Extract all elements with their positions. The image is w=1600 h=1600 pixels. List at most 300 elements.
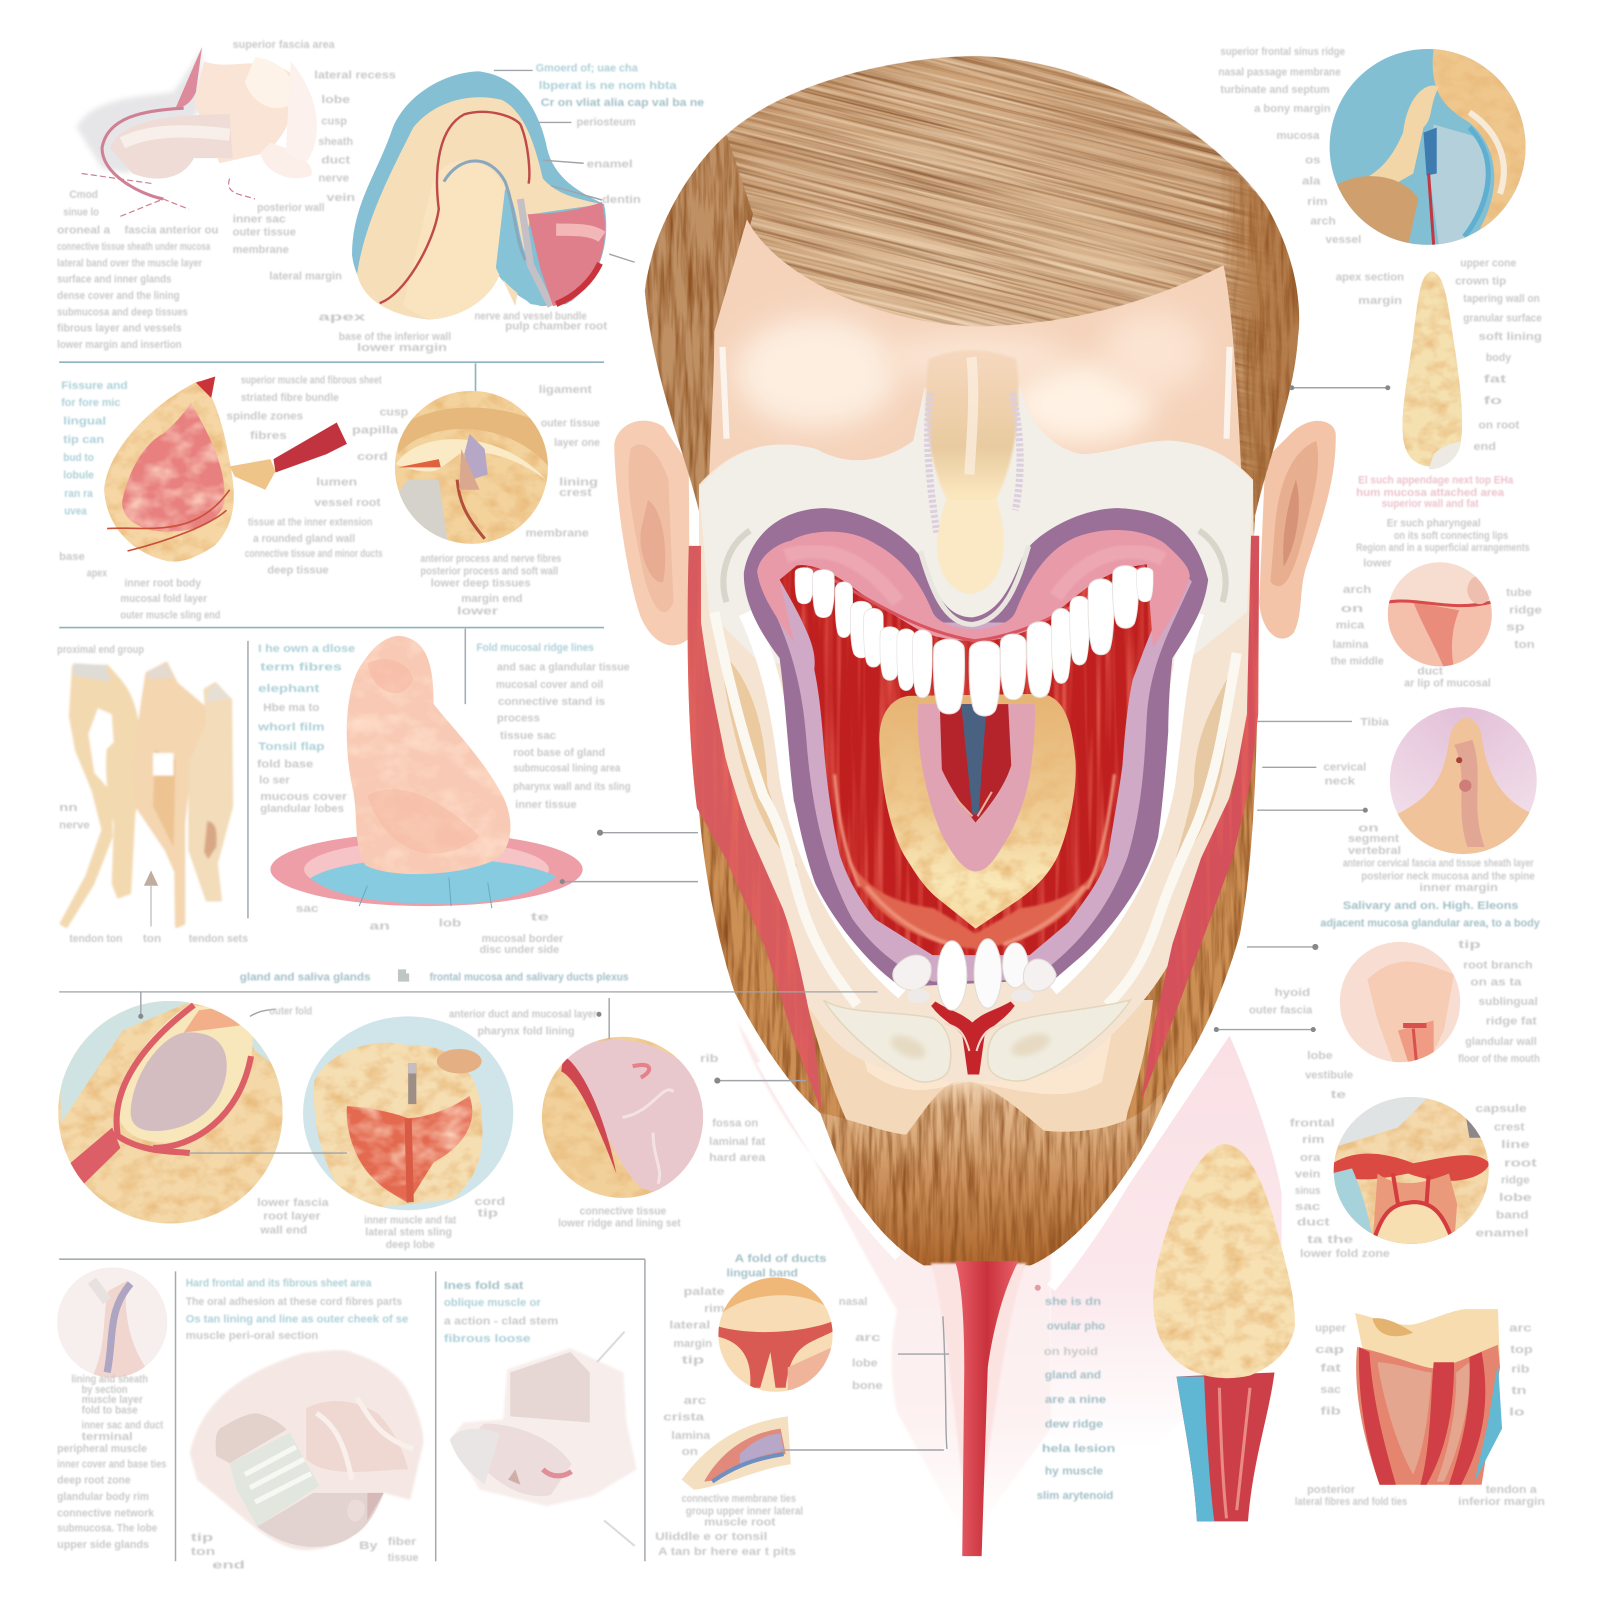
labels: R8: inferior margin xyxy=(1458,1496,1545,1508)
labels: R4: neck xyxy=(1324,776,1355,788)
labels: gland: striated fibre bundle xyxy=(241,392,339,404)
bone and fascia mask xyxy=(699,388,1255,1082)
labels: tissue bundle panel: oblique muscle or xyxy=(444,1297,541,1309)
labels: R1: superior frontal sinus ridge xyxy=(1220,46,1345,58)
labels: small details: Uliddle e or tonsil xyxy=(655,1531,767,1543)
labels: neck column: ovular pho xyxy=(1047,1321,1106,1333)
labels: gland: fibres xyxy=(250,430,287,442)
labels: R6: frontal xyxy=(1290,1118,1335,1130)
head illustration xyxy=(529,0,1415,1265)
leader line: R2 xyxy=(1289,385,1390,390)
white ribbons xyxy=(747,612,1196,992)
labels: pale circle xyxy=(57,1374,166,1551)
labels: R1: a bony margin xyxy=(1254,103,1331,115)
beard and jaw silhouette xyxy=(694,714,1257,1265)
labels: circular tissue detail: outer tissue xyxy=(541,418,600,430)
labels: middle bottom panel: Os tan lining and line as outer cheek of se xyxy=(186,1313,408,1325)
panel: right circle R1 xyxy=(1327,46,1531,250)
labels: gland: lingual xyxy=(63,415,106,427)
labels: R6: capsule xyxy=(1476,1103,1527,1115)
labels: top-left text column: lateral band over the muscle layer xyxy=(57,257,202,269)
labels: R6: rim xyxy=(1302,1134,1324,1146)
labels: pink mass: Hbe ma to xyxy=(263,702,320,714)
labels: R1: nasal passage membrane xyxy=(1218,67,1341,79)
upper gum xyxy=(757,530,1190,648)
panel: gland with blue and red stem xyxy=(1153,1144,1295,1521)
labels: R5: sublingual xyxy=(1479,996,1538,1008)
beard on chin xyxy=(820,1079,1176,1265)
mouth purple ring xyxy=(744,508,1208,987)
labels: R3: ton xyxy=(1514,639,1535,651)
labels: pink mass: process xyxy=(497,712,540,724)
labels: small details: lingual band xyxy=(727,1268,798,1280)
labels: circles row: inner muscle and fat xyxy=(364,1214,456,1226)
labels: middle bottom panel: By xyxy=(359,1540,378,1552)
labels: pink mass: inner tissue xyxy=(515,799,577,811)
panel: pale circle xyxy=(57,1267,167,1378)
labels: circles row: lower fascia xyxy=(257,1197,330,1209)
labels: R8: sac xyxy=(1320,1384,1341,1396)
labels: pale circle: terminal xyxy=(82,1431,133,1443)
labels: R8: tendon a xyxy=(1486,1484,1538,1496)
labels: top-left text column: dense cover and the lining xyxy=(57,290,180,302)
leader lines: tooth section xyxy=(494,70,635,262)
panel: pale tissue bundle xyxy=(450,1332,637,1546)
labels: neck column: are a nine xyxy=(1045,1394,1106,1406)
labels: pale circle: inner sac and duct xyxy=(82,1420,164,1432)
labels: R4: vertebral xyxy=(1348,845,1401,857)
panel: leaf shaped detail xyxy=(682,1416,791,1490)
labels: top-left text column: nerve xyxy=(318,173,349,185)
text block: blue note: adjacent mucosa glandular area, to a body xyxy=(1320,918,1540,930)
labels: pale circle: by section xyxy=(82,1384,128,1396)
labels: R3: duct xyxy=(1417,665,1443,677)
central throat slit xyxy=(940,704,1011,822)
labels: circular tissue detail: lining xyxy=(559,477,598,489)
labels: circular tissue detail: margin end xyxy=(461,593,522,605)
labels: tooth section: lbperat is ne nom hbta xyxy=(539,80,678,92)
labels: top-left text column: duct xyxy=(321,154,351,166)
labels: circular tissue detail: ligament xyxy=(539,384,592,396)
labels: circles row: lateral stem sling xyxy=(365,1227,452,1239)
panel: pink mass on disc xyxy=(270,636,583,908)
leader lines: right mid xyxy=(1214,721,1368,1032)
labels: tissue bundle panel: fibrous loose xyxy=(444,1333,531,1345)
labels: circles row: laminal fat xyxy=(709,1136,766,1148)
labels: circles row: root layer xyxy=(263,1210,320,1222)
labels: top-left text column: oroneal a xyxy=(57,225,111,237)
labels: R5: tip xyxy=(1458,939,1481,951)
labels: R1 xyxy=(1218,46,1361,246)
labels: gland: base xyxy=(59,551,85,563)
beige patches xyxy=(722,653,798,867)
shadow inside bone band xyxy=(723,531,1226,602)
labels: R6: band xyxy=(1496,1209,1529,1221)
labels: small details: arc xyxy=(855,1332,881,1344)
labels: bones: tendon sets xyxy=(189,933,248,945)
lower red frenulum xyxy=(934,1004,1012,1071)
labels: R2 xyxy=(1336,257,1542,453)
panel: muscle block R8 xyxy=(1355,1309,1502,1485)
labels: R2: body xyxy=(1486,352,1511,364)
labels: R8: tn xyxy=(1511,1385,1527,1397)
labels: small details: crista xyxy=(663,1411,706,1423)
labels: pink mass: pharynx wall and its sling xyxy=(513,781,631,793)
labels: small details: group upper inner lateral xyxy=(686,1505,803,1517)
labels: small details: margin xyxy=(673,1338,712,1350)
labels: gland: outer muscle sling end xyxy=(120,609,220,621)
text block: pink note xyxy=(1356,475,1514,510)
labels: pale circle: glandular body rim xyxy=(57,1491,149,1503)
labels: neck column: hy muscle xyxy=(1045,1465,1103,1477)
labels: gland: lobule xyxy=(63,470,94,482)
upper bone band xyxy=(699,388,1253,663)
labels: R6: duct xyxy=(1297,1217,1330,1229)
labels: top-left text column: lower margin and insertion xyxy=(57,339,182,351)
labels: gland: tip can xyxy=(63,434,104,446)
labels: R3: mica xyxy=(1336,620,1365,632)
labels: tooth section: apex xyxy=(318,311,365,323)
panel: bones xyxy=(61,663,232,927)
labels: tooth section: lateral margin xyxy=(269,271,342,283)
labels: middle bottom panel: Hard frontal and its fibrous sheet area xyxy=(186,1278,372,1290)
labels: top-left text column: connective tissue sheath under mucosa xyxy=(57,241,211,253)
labels: neck column: on hyoid xyxy=(1044,1346,1098,1358)
labels: R6: line xyxy=(1501,1139,1530,1151)
labels: pale circle: muscle layer xyxy=(82,1394,143,1406)
labels: R4: posterior neck mucosa and the spine xyxy=(1361,871,1535,883)
labels: R3: sp xyxy=(1506,622,1525,634)
labels: R2: upper cone xyxy=(1460,257,1516,269)
labels: pink mass: lob xyxy=(439,918,462,930)
leader lines: circles row xyxy=(138,992,806,1153)
lower flaps xyxy=(823,1000,1131,1082)
hair xyxy=(529,0,1415,705)
pink background right of neck xyxy=(1051,1036,1282,1449)
labels: R8: rib xyxy=(1511,1363,1530,1375)
labels: pink mass: tissue sac xyxy=(500,730,556,742)
panel: circle B butterfly gland xyxy=(301,1015,515,1214)
leader lines: pink mass xyxy=(560,830,698,884)
labels: gland: mucosal fold layer xyxy=(120,593,207,605)
labels: middle bottom panel: tip xyxy=(191,1532,214,1544)
labels: pale circle: fold to base xyxy=(82,1404,138,1416)
labels: bones: tendon ton xyxy=(69,933,122,945)
salmon highlight strokes xyxy=(835,776,1114,944)
labels: pink mass: and sac a glandular tissue xyxy=(497,661,630,673)
labels: bones: proximal end group xyxy=(57,644,144,656)
labels: circular tissue detail xyxy=(314,384,600,617)
labels: gland: deep tissue xyxy=(267,564,329,576)
labels: pink mass: fold base xyxy=(257,758,313,770)
labels: top-left text column: outer tissue xyxy=(233,227,296,239)
inner cream ring xyxy=(879,694,1076,929)
labels: circular tissue detail: anterior process and nerve fibres xyxy=(420,553,561,565)
labels: gland: superior muscle and fibrous sheet xyxy=(241,375,382,387)
labels: circular tissue detail: crest xyxy=(559,487,592,499)
section divider 3 xyxy=(59,991,878,993)
labels: gland: for fore mic xyxy=(61,397,120,409)
labels: R4: on xyxy=(1358,823,1379,835)
labels: R5: hyoid xyxy=(1274,987,1310,999)
labels: R3: ridge xyxy=(1509,604,1542,616)
labels: pink mass: lo ser xyxy=(259,775,290,787)
labels: circular tissue detail: papilla xyxy=(352,425,399,437)
labels: circles row: connective tissue xyxy=(580,1205,666,1217)
labels: R2: apex section xyxy=(1336,272,1404,284)
labels: bones: nn xyxy=(59,802,78,814)
labels: pale circle: connective network xyxy=(57,1507,154,1519)
labels: top-left text column: sinue lo xyxy=(63,206,99,218)
labels: R2: soft lining xyxy=(1479,331,1542,343)
labels: pale circle: submucosa. The lobe xyxy=(57,1523,157,1535)
red jaw muscle left xyxy=(688,546,822,1114)
heading: section four: frontal mucosa and salivary ducts plexus xyxy=(430,972,629,984)
labels: circles row: deep lobe xyxy=(386,1239,435,1251)
white ring around nose bulb xyxy=(920,546,1029,624)
section divider 4 xyxy=(59,1259,645,1561)
panel: gland with tail xyxy=(104,377,347,562)
panel: pale fascia blob xyxy=(190,1350,423,1550)
labels: circular tissue detail: lower xyxy=(457,605,498,617)
labels: small details: lateral xyxy=(669,1320,710,1332)
labels: small details: lamina xyxy=(671,1430,711,1442)
labels: R3: arch xyxy=(1343,584,1371,596)
nose xyxy=(926,350,1020,594)
labels: R1: ala xyxy=(1302,176,1322,188)
labels: R5: on as ta xyxy=(1470,977,1523,989)
labels: middle bottom panel: ton xyxy=(191,1546,215,1558)
labels: small details: nasal xyxy=(839,1296,867,1308)
text block: blue note xyxy=(1320,900,1540,930)
panel: circle R6 xyxy=(1332,1097,1492,1245)
labels: R1: arch xyxy=(1310,215,1336,227)
section divider 1 xyxy=(59,362,604,393)
labels: R3: ar lip of mucosal xyxy=(1404,678,1491,690)
labels: R2: fo xyxy=(1484,395,1503,407)
text block: grey note: on its soft connecting lips xyxy=(1394,530,1508,542)
labels: neck column: slim arytenoid xyxy=(1037,1490,1113,1502)
labels: circles row: wall end xyxy=(259,1225,307,1237)
labels: circles row: fossa on xyxy=(712,1118,758,1130)
labels: R1: vessel xyxy=(1326,234,1361,246)
labels: circles row: cord xyxy=(474,1196,505,1208)
labels: tooth section: lower margin xyxy=(357,342,447,354)
labels: R6: lower fold zone xyxy=(1300,1248,1390,1260)
labels: tooth section: enamel xyxy=(587,158,633,170)
labels: R2: crown tip xyxy=(1455,276,1507,288)
labels: gland: bud to xyxy=(63,452,94,464)
labels: R8: arc xyxy=(1509,1323,1532,1335)
labels: R6: sinus xyxy=(1295,1185,1320,1197)
labels: neck column: hela lesion xyxy=(1042,1443,1115,1455)
labels: R6: vein xyxy=(1295,1169,1320,1181)
labels: pink mass: submucosal lining area xyxy=(513,762,621,774)
text block: pink note: hum mucosa attached area xyxy=(1356,487,1505,499)
labels: R2: granular surface xyxy=(1463,312,1542,324)
labels: circles row: anterior duct and mucosal layer xyxy=(449,1008,597,1020)
right ear xyxy=(1259,421,1336,639)
text block: grey note: Region and in a superficial arrangements xyxy=(1356,542,1530,554)
labels: top-left text column: fibrous layer and vessels xyxy=(57,323,182,335)
labels: R8: fat xyxy=(1320,1362,1341,1374)
labels: neck column: she is dn xyxy=(1045,1296,1101,1308)
labels: R6: ridge xyxy=(1501,1175,1530,1187)
oral cavity red xyxy=(780,564,1172,955)
labels: R2: on root xyxy=(1479,420,1520,432)
labels: middle bottom panel: muscle peri-oral section xyxy=(186,1330,318,1342)
labels: pink mass: elephant xyxy=(258,683,320,695)
labels: R4: segment xyxy=(1348,833,1399,845)
white streak along the jaw xyxy=(1051,1026,1209,1288)
labels: circular tissue detail: cusp xyxy=(380,406,409,418)
pink background left of neck xyxy=(737,1020,1051,1541)
labels: pink mass: te xyxy=(531,911,549,923)
labels: tissue bundle panel: a action - clad stem xyxy=(444,1315,558,1327)
labels: R6: ta the xyxy=(1307,1234,1353,1246)
labels: bones: ton xyxy=(143,933,161,945)
labels: circular tissue detail: lower deep tissues xyxy=(431,578,531,590)
labels: circles row: hard area xyxy=(709,1152,767,1164)
panel: circle R4 neck xyxy=(1388,704,1541,857)
labels: top-left text column: lateral recess xyxy=(314,70,396,82)
labels: R6: lobe xyxy=(1499,1192,1532,1204)
chin highlight xyxy=(857,1031,1112,1094)
lavender inner band xyxy=(760,546,1192,982)
labels: pink mass: disc under side xyxy=(480,944,559,956)
labels: circular tissue detail: vessel root xyxy=(314,497,381,509)
labels: top-left text column: membrane xyxy=(233,244,289,256)
labels: gland: uvea xyxy=(64,505,88,517)
labels: pink mass: whorl film xyxy=(257,722,324,734)
labels: tooth section: periosteum xyxy=(577,117,636,129)
labels: pink mass: connective stand is xyxy=(498,696,605,708)
labels: pale circle: deep root zone xyxy=(57,1475,131,1487)
panel: blue-lined tooth section xyxy=(352,71,606,319)
labels: R3: lamina xyxy=(1333,639,1369,651)
panel: circular tissue detail xyxy=(393,388,551,551)
section divider 2 xyxy=(59,627,604,629)
labels: R4: Tibia xyxy=(1360,717,1390,729)
labels: R1: rim xyxy=(1307,196,1328,208)
panel: circle C tissue xyxy=(541,1036,704,1204)
panel: top-left fascia illustration xyxy=(77,47,317,216)
labels: R6: crest xyxy=(1494,1122,1525,1134)
labels: top-left text column: fascia anterior ou xyxy=(124,225,218,237)
labels: R3 xyxy=(1331,584,1542,690)
labels: R5 xyxy=(1249,939,1540,1101)
labels: R5: floor of the mouth xyxy=(1458,1053,1540,1065)
panel: circle R5 xyxy=(1340,942,1460,1062)
labels: R8: lateral fibres and fold ties xyxy=(1295,1496,1407,1508)
labels: R2: tapering wall on xyxy=(1463,293,1540,305)
labels: top-left text column: lobe xyxy=(321,94,350,106)
panel: cone R2 xyxy=(1402,271,1462,469)
gum lower edge xyxy=(806,566,1145,641)
labels: circles row: rib xyxy=(700,1053,719,1065)
labels: R6: ora xyxy=(1300,1152,1322,1164)
labels: R2: end xyxy=(1473,441,1496,453)
text block: grey note xyxy=(1356,518,1530,569)
labels: small details: lobe xyxy=(852,1357,878,1369)
text block: grey note: lower xyxy=(1363,557,1392,569)
labels: R3: tube xyxy=(1506,587,1532,599)
labels: middle bottom panel: tissue xyxy=(388,1552,418,1564)
labels: middle bottom panel: end xyxy=(212,1559,245,1571)
labels: R4 xyxy=(1323,717,1535,894)
text block: grey note: Er such pharyngeal xyxy=(1387,518,1481,530)
labels: gland: spindle zones xyxy=(227,410,303,422)
gum highlight xyxy=(786,551,1163,602)
labels: bones xyxy=(57,644,248,945)
labels: R8: posterior xyxy=(1307,1484,1355,1496)
labels: tooth section: Gmoerd of; uae cha xyxy=(536,62,639,74)
lower teeth xyxy=(893,939,1056,1010)
labels: R5: outer fascia xyxy=(1249,1004,1313,1016)
chin skin under the mouth xyxy=(806,1000,1153,1179)
face skin xyxy=(706,219,1243,571)
labels: neck column: gland and xyxy=(1045,1370,1101,1382)
labels: top-left text column: surface and inner glands xyxy=(57,274,171,286)
labels: small details: palate xyxy=(684,1286,725,1298)
labels: R6: sac xyxy=(1295,1201,1320,1213)
labels: middle bottom panel: The oral adhesion at these cord fibres parts xyxy=(186,1296,402,1308)
labels: tooth section: dentin xyxy=(602,194,641,206)
labels: R1: os xyxy=(1305,154,1320,166)
arrow: bones xyxy=(144,870,158,927)
labels: bones: nerve xyxy=(59,820,90,832)
labels: small details: arc xyxy=(684,1395,706,1407)
labels: small details: tip xyxy=(682,1354,705,1366)
labels: R5: lobe xyxy=(1307,1050,1333,1062)
labels: pink mass xyxy=(257,642,631,956)
labels: R3: the middle xyxy=(1331,655,1384,667)
labels: R6: root xyxy=(1504,1157,1537,1169)
labels: small details: A tan br here ear t pits xyxy=(658,1546,796,1558)
frenulum white lines xyxy=(944,1023,1005,1051)
labels: middle bottom panel: fiber xyxy=(388,1536,416,1548)
labels: circular tissue detail: membrane xyxy=(526,528,589,540)
labels: gland: a rounded gland wall xyxy=(253,533,355,545)
labels: top-left text column: cusp xyxy=(321,115,347,127)
salmon muscle area xyxy=(845,852,1106,949)
labels: top-left text column: sheath xyxy=(318,136,353,148)
labels: top-left text column: vein xyxy=(327,192,355,204)
labels: R8: top xyxy=(1510,1344,1533,1356)
labels: tooth section: base of the inferior wall xyxy=(339,331,451,343)
labels: top-left text column: Cmod xyxy=(69,189,98,201)
labels: R2: fat xyxy=(1484,374,1507,386)
white streak along the beard left xyxy=(760,1061,898,1257)
labels: pink mass: mucosal cover and oil xyxy=(496,679,603,691)
text block: blue note: Salivary and on. High. Eleons xyxy=(1343,900,1518,912)
panel: circle R3 xyxy=(1386,561,1494,669)
labels: circular tissue detail: posterior process and soft wall xyxy=(420,565,558,577)
labels: tissue bundle panel xyxy=(444,1280,558,1345)
labels: R5: ridge fat xyxy=(1486,1015,1537,1027)
labels: R4: cervical xyxy=(1323,761,1366,773)
labels: pale circle: peripheral muscle xyxy=(57,1443,147,1455)
labels: R6 xyxy=(1290,1103,1537,1260)
labels: gland: ran ra xyxy=(64,488,94,500)
labels: tissue bundle panel: Ines fold sat xyxy=(444,1280,524,1292)
labels: pink mass: Fold mucosal ridge lines xyxy=(477,642,594,654)
labels: pink mass: I he own a dlose xyxy=(258,643,355,655)
nose bulb front xyxy=(937,500,1003,594)
labels: R5: te xyxy=(1331,1089,1346,1101)
labels: small details: muscle root xyxy=(704,1517,776,1529)
labels: gland xyxy=(59,375,383,621)
